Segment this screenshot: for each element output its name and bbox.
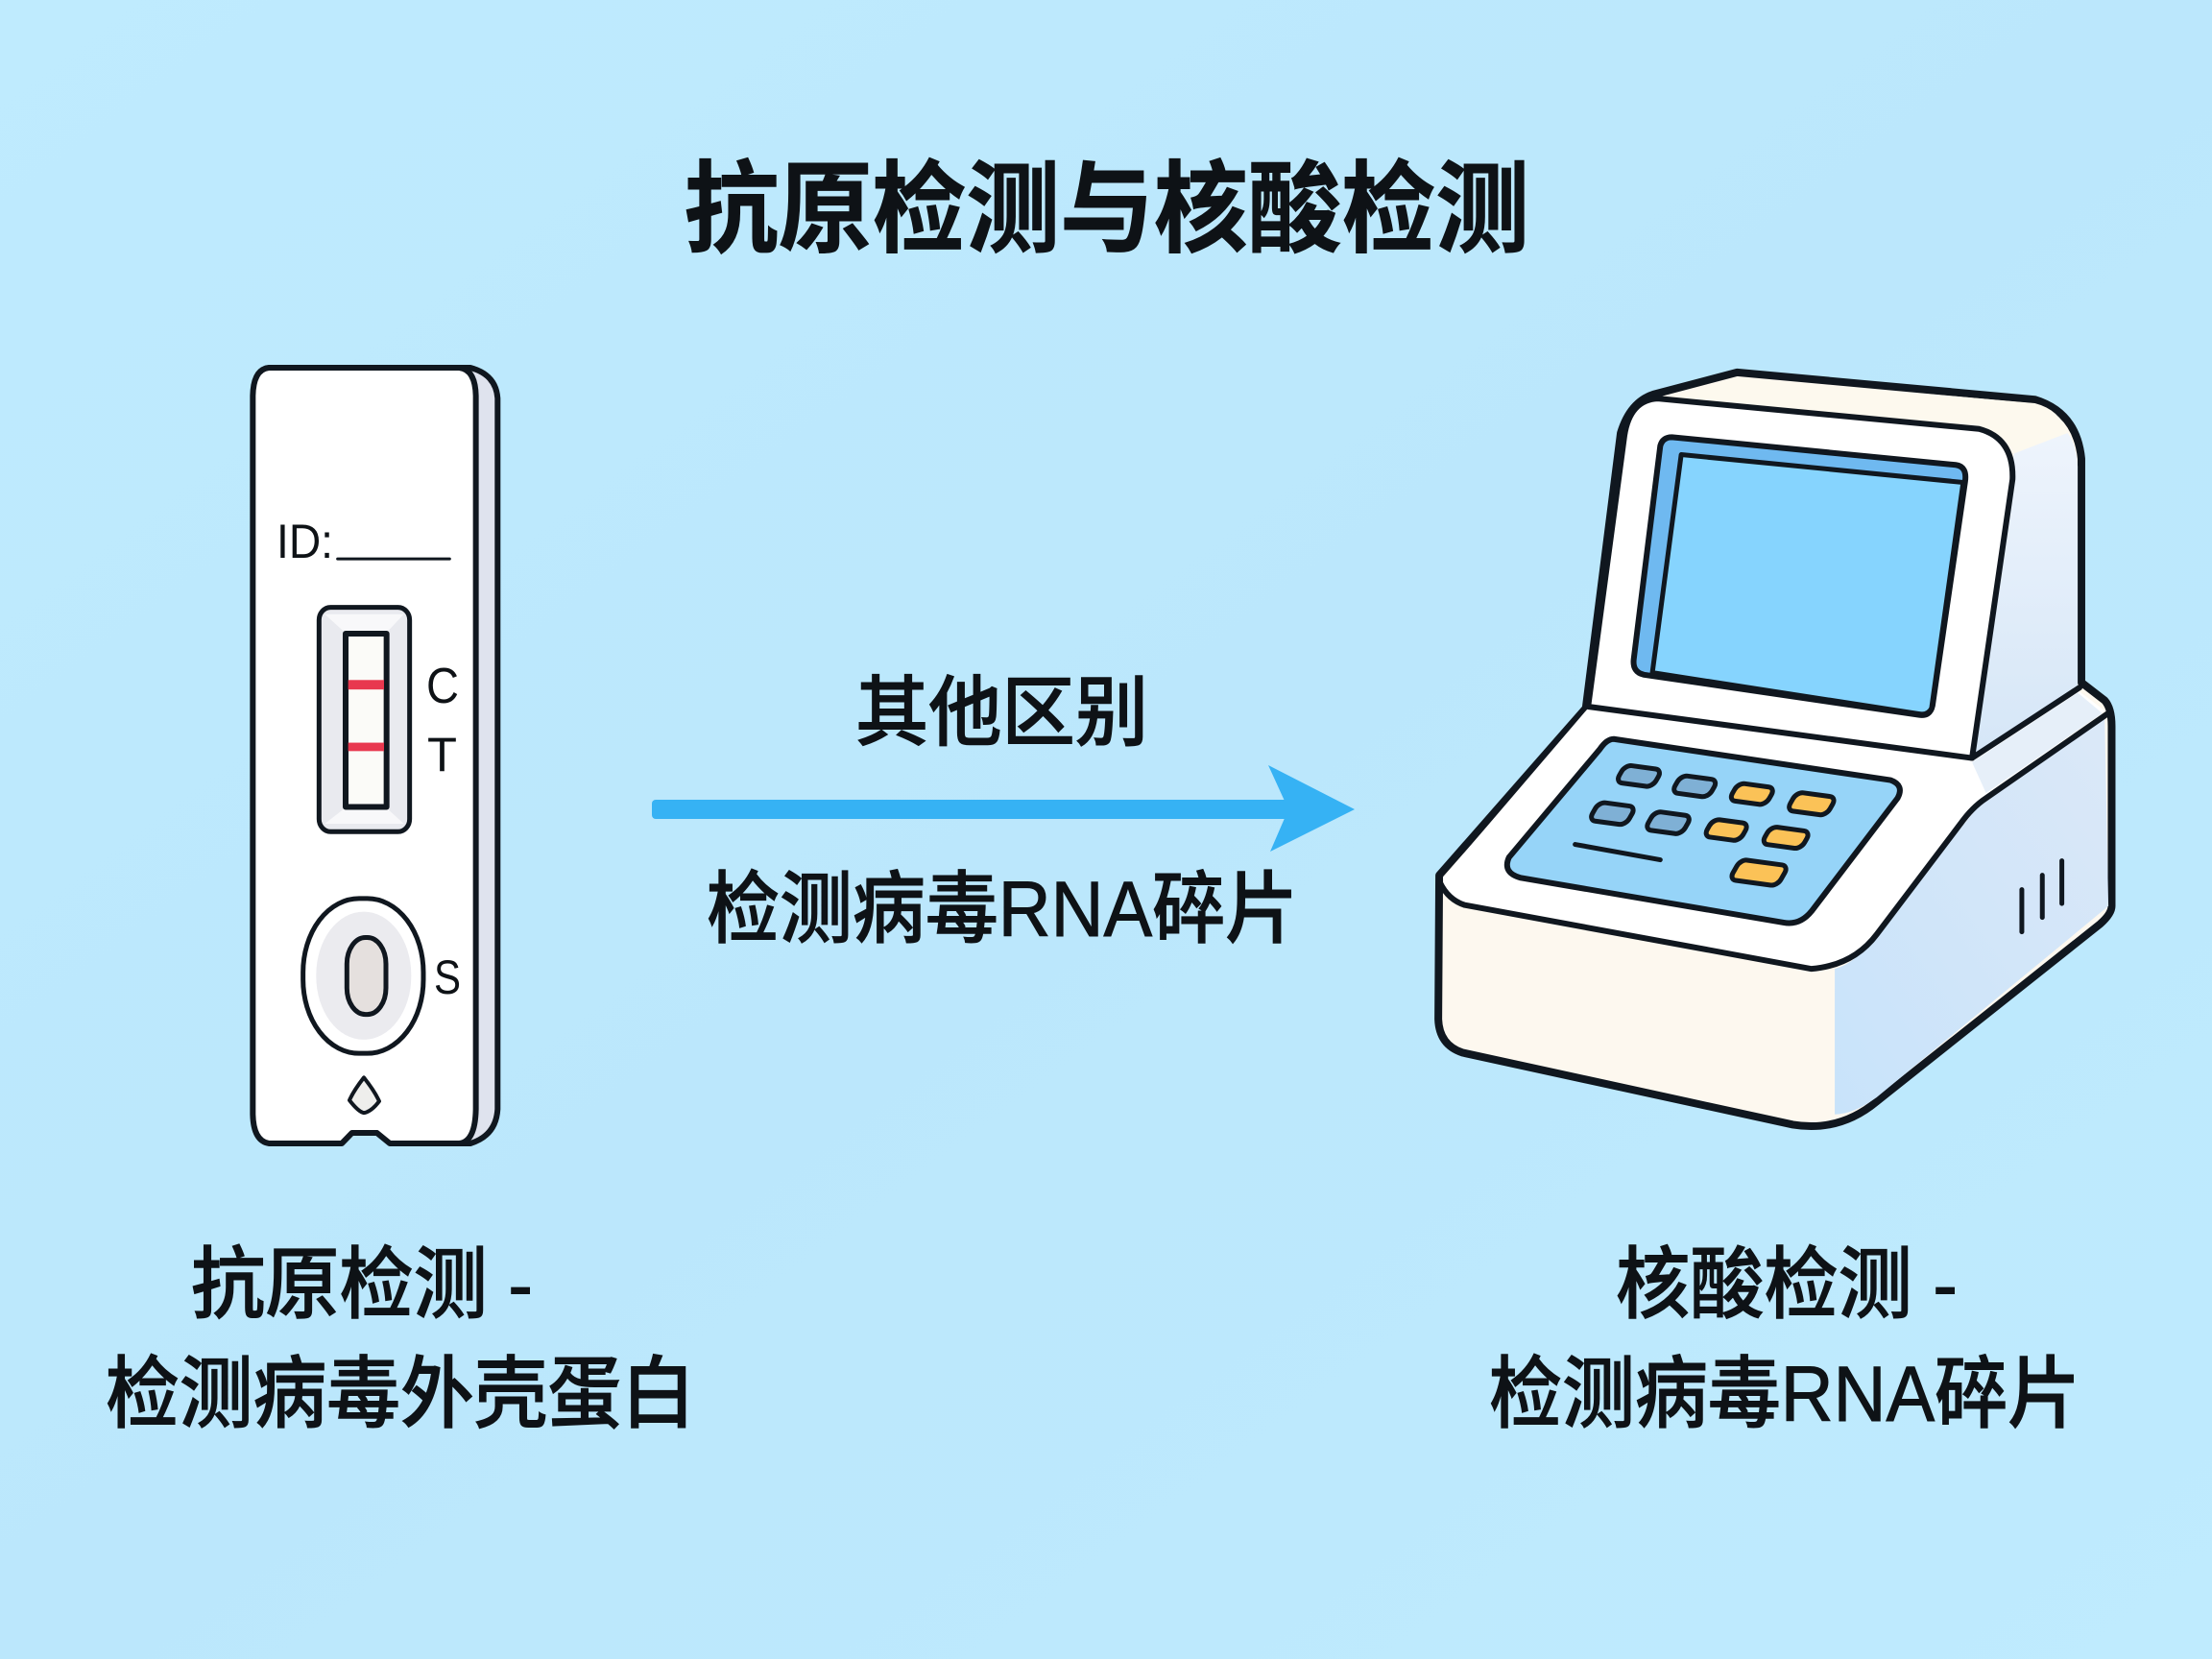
test strip bbox=[346, 634, 387, 806]
icon: nucleic acid analyzer bbox=[1438, 373, 2111, 1126]
cassette front face bbox=[252, 368, 476, 1143]
label: nucleic acid test: 检测病毒RNA碎片 bbox=[1489, 1351, 2080, 1438]
vent slots bbox=[2022, 861, 2062, 932]
screen housing front bbox=[1588, 398, 2012, 758]
cassette letter: C: C bbox=[426, 659, 459, 714]
cassette letter: T: T bbox=[427, 728, 457, 781]
ID write-in line bbox=[338, 558, 449, 561]
cassette side edge bbox=[451, 368, 497, 1143]
icon: sample drop marker bbox=[349, 1077, 379, 1113]
screen bbox=[1652, 455, 1963, 714]
keypad panel bbox=[1507, 739, 1900, 924]
control line bbox=[349, 680, 384, 689]
screen housing side bbox=[1974, 433, 2078, 758]
base top face bbox=[1443, 690, 2104, 968]
base front edge line bbox=[1440, 713, 2107, 969]
label: antigen test bbox=[106, 1241, 695, 1438]
grey keys bbox=[1589, 765, 1719, 834]
text: detects viral RNA fragments: 检测病毒RNA碎片 bbox=[707, 866, 1298, 953]
label: antigen test: 检测病毒外壳蛋白 bbox=[106, 1351, 695, 1438]
label: antigen test: 抗原检测 - bbox=[191, 1241, 533, 1329]
test line bbox=[349, 743, 384, 751]
sample well inner bbox=[316, 912, 411, 1040]
right side face bbox=[1835, 717, 2108, 1115]
orange keys bbox=[1703, 782, 1837, 886]
sample well housing bbox=[303, 899, 423, 1053]
screen bezel bbox=[1634, 437, 1965, 715]
label: nucleic acid test: 核酸检测 - bbox=[1616, 1241, 1958, 1329]
housing to base edge bbox=[1972, 687, 2080, 758]
screen housing top bbox=[1671, 377, 2067, 452]
title: 抗原检测与核酸检测 bbox=[685, 155, 1529, 266]
cassette letter: S: S bbox=[434, 950, 461, 1004]
sample well opening bbox=[347, 938, 386, 1015]
keypad display line bbox=[1575, 845, 1660, 860]
label: nucleic acid test bbox=[1489, 1241, 2080, 1438]
top face shading near the housing bbox=[1972, 693, 2103, 793]
arrow bbox=[652, 765, 1355, 852]
cassette letter: ID: ID: bbox=[276, 515, 333, 568]
heading: other differences: 其他区别 bbox=[855, 670, 1148, 756]
icon: antigen test cassette bbox=[252, 368, 497, 1143]
analyzer silhouette bbox=[1438, 373, 2111, 1126]
result window housing bbox=[319, 608, 410, 831]
